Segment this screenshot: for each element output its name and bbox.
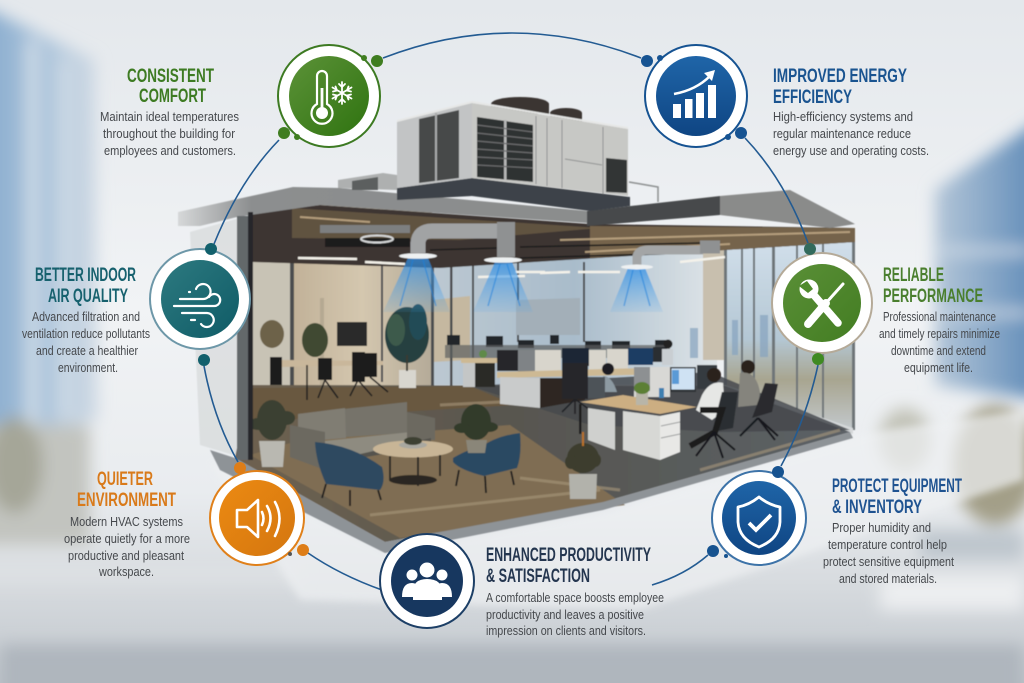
- text: protect equipment and inventory: protect sensitive equipment: [823, 555, 954, 569]
- roof slab: [178, 187, 855, 228]
- planter by the glass: [249, 400, 295, 467]
- coffee table: [373, 437, 453, 486]
- text: protect equipment and inventory: & INVENTORY: [832, 497, 922, 518]
- text: quieter environment: ENVIRONMENT: [77, 490, 176, 511]
- condenser fans: [491, 97, 582, 122]
- text: better indoor air quality: environment.: [58, 361, 118, 375]
- text: consistent comfort: employees and customers.: [104, 144, 236, 158]
- corner glass pane: [253, 208, 292, 440]
- person at back desk: [588, 363, 617, 398]
- text: consistent comfort: COMFORT: [139, 86, 206, 107]
- text: improved energy efficiency: High-efficiency systems and: [773, 110, 913, 124]
- tall plant in meeting room: [385, 304, 429, 388]
- text: better indoor air quality: ventilation reduce pollutants: [22, 327, 150, 341]
- small rear unit: [338, 173, 397, 190]
- front louvers: [477, 117, 533, 182]
- text: consistent comfort: [100, 66, 239, 158]
- icon: consistent comfort thermometer and snowflake: [278, 45, 383, 147]
- rug and wooden floor: [250, 425, 625, 538]
- icon: indoor air quality wind: [150, 243, 250, 366]
- text: quieter environment: operate quietly for a more: [64, 532, 190, 546]
- left louvers: [419, 110, 459, 183]
- wall screen: [337, 322, 367, 346]
- text: protect equipment and inventory: temperature control help: [828, 538, 947, 552]
- unit base: [397, 178, 630, 211]
- text: consistent comfort: Maintain ideal temperatures: [100, 110, 239, 124]
- text: enhanced productivity and satisfaction: & SATISFACTION: [486, 566, 590, 587]
- text: protect equipment and inventory: [823, 476, 962, 586]
- icon: quieter environment speaker: [210, 462, 309, 565]
- text: enhanced productivity and satisfaction: productivity and leaves a positive: [486, 608, 644, 622]
- text: reliable performance: Professional maintenance: [883, 310, 996, 324]
- back-room plants: [260, 320, 328, 357]
- floor: [235, 385, 850, 542]
- text: quieter environment: [64, 469, 190, 579]
- text: quieter environment: QUIETER: [97, 469, 153, 490]
- back row workstations: [445, 335, 680, 414]
- ceiling diffusers: [399, 253, 653, 270]
- seated worker right: [738, 360, 778, 440]
- connector arcs: [204, 33, 818, 590]
- text: enhanced productivity and satisfaction: ENHANCED PRODUCTIVITY: [486, 545, 651, 566]
- text: reliable performance: [879, 265, 1000, 375]
- right face: [472, 103, 628, 196]
- back wall and glass partitions: [290, 205, 725, 390]
- mid floor planter: [454, 404, 498, 453]
- text: reliable performance: RELIABLE: [883, 265, 944, 286]
- text: better indoor air quality: and create a healthier: [36, 344, 138, 358]
- icon: energy efficiency chart: [641, 45, 747, 147]
- text: improved energy efficiency: regular maintenance reduce: [773, 127, 911, 141]
- front planter: [565, 432, 601, 499]
- left face: [397, 103, 472, 188]
- computer monitors: [634, 365, 717, 397]
- text: protect equipment and inventory: and stored materials.: [839, 572, 937, 586]
- text: improved energy efficiency: energy use and operating costs.: [773, 144, 929, 158]
- glass left wing: [190, 215, 250, 460]
- text: protect equipment and inventory: Proper humidity and: [832, 521, 931, 535]
- potted desk plant: [634, 382, 664, 405]
- text: reliable performance: downtime and extend: [891, 344, 986, 358]
- icon: reliable performance wrench and screwdriver: [772, 243, 872, 365]
- blue armchair left: [315, 442, 384, 506]
- icon: productivity people: [380, 534, 474, 628]
- text: better indoor air quality: Advanced filtration and: [32, 310, 140, 324]
- text: better indoor air quality: [22, 265, 150, 375]
- air cones: [383, 258, 663, 312]
- service panels: [536, 116, 603, 194]
- text: quieter environment: workspace.: [98, 565, 154, 579]
- meeting table and chairs: [270, 352, 388, 400]
- icon: protect equipment shield: [707, 466, 806, 565]
- blue armchair right: [453, 433, 521, 493]
- text: enhanced productivity and satisfaction: impression on clients and visitors.: [486, 624, 646, 638]
- rooftop unit: [338, 97, 658, 211]
- front desks: [579, 395, 697, 460]
- text: better indoor air quality: BETTER INDOOR: [35, 265, 136, 286]
- ducts: [320, 222, 720, 265]
- text: enhanced productivity and satisfaction: A comfortable space boosts employee: [486, 591, 664, 605]
- standing person: [662, 340, 673, 365]
- text: improved energy efficiency: IMPROVED ENERGY: [773, 66, 907, 87]
- text: consistent comfort: CONSISTENT: [127, 66, 214, 87]
- text: improved energy efficiency: [773, 66, 929, 158]
- text: improved energy efficiency: EFFICIENCY: [773, 87, 852, 108]
- text: enhanced productivity and satisfaction: [486, 545, 664, 638]
- corner post: [237, 212, 253, 460]
- small grille: [606, 158, 627, 193]
- text: quieter environment: Modern HVAC systems: [70, 515, 183, 529]
- sofa: [290, 402, 435, 470]
- railing: [629, 182, 658, 202]
- text: better indoor air quality: AIR QUALITY: [48, 286, 128, 307]
- right windows: [690, 228, 855, 434]
- office building cutaway: [178, 97, 855, 553]
- seated worker left: [690, 368, 738, 458]
- text: quieter environment: productive and pleasant: [68, 549, 184, 563]
- ceiling lights: [298, 257, 725, 277]
- slab edge: [210, 432, 853, 553]
- text: consistent comfort: throughout the building for: [103, 127, 235, 141]
- ceiling: [253, 205, 855, 268]
- text: reliable performance: equipment life.: [904, 361, 973, 375]
